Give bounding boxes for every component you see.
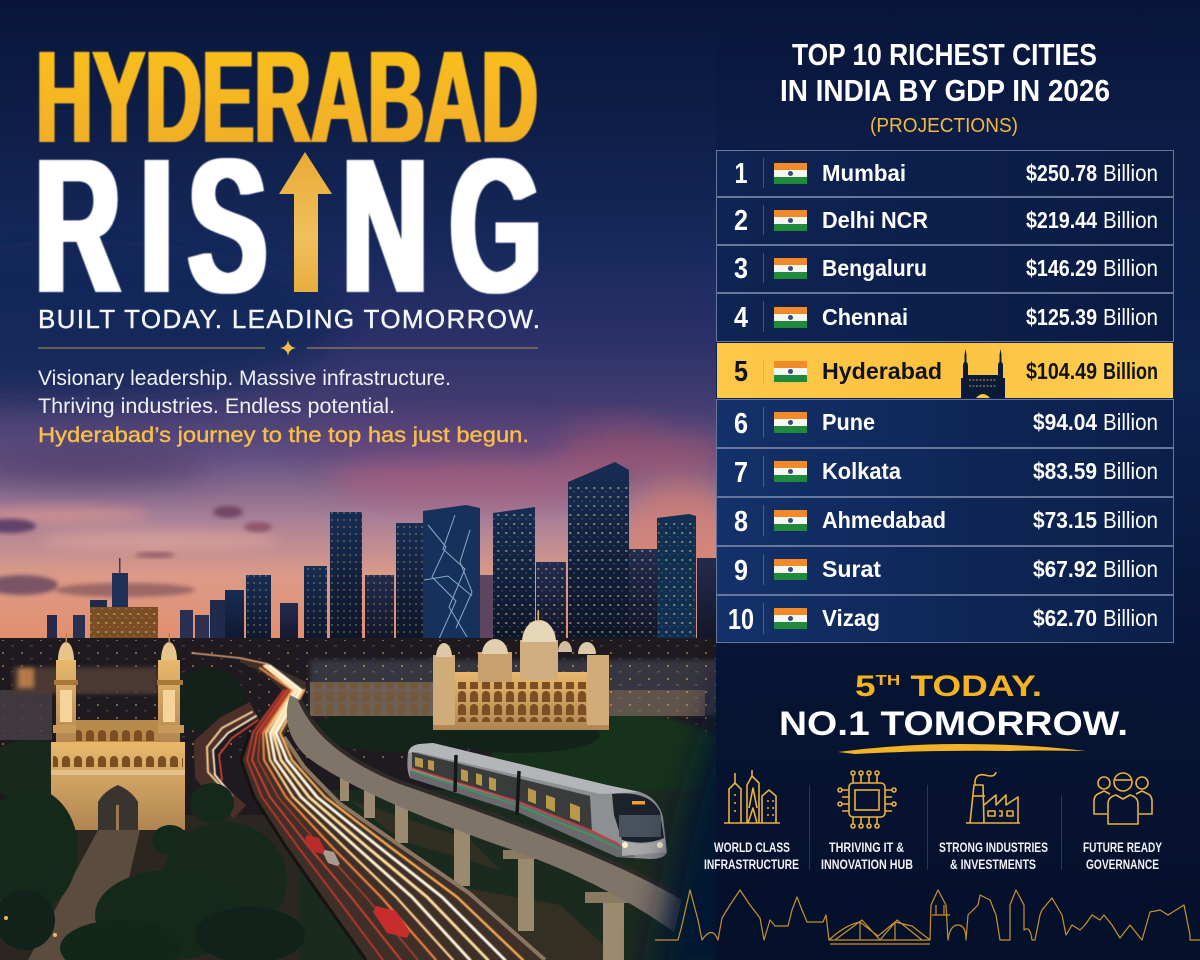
row 4 Chennai: $125.39: [1026, 304, 1097, 330]
row 6 Pune: Pune: [822, 409, 875, 435]
label: innovation: [821, 840, 913, 872]
row 9 Surat: $67.92: [1033, 556, 1097, 582]
row 6 Pune: Billion: [1103, 409, 1158, 435]
gold line-art skyline: [655, 890, 1200, 944]
ranking table: [716, 150, 1174, 642]
brush underline: [838, 744, 1086, 754]
benefit columns: [704, 770, 1162, 872]
row 5 Hyderabad highlighted: $104.49: [1026, 358, 1097, 384]
title line: RISING: RIS: [35, 118, 267, 333]
metro pillars: [340, 775, 631, 960]
row 7 Kolkata: [716, 448, 1174, 496]
metro viaduct deck: [287, 695, 682, 932]
row 7 Kolkata: 7: [734, 457, 748, 489]
charminar body: [51, 742, 185, 830]
row 1 Mumbai: Mumbai: [822, 160, 906, 186]
highway with light trails: [192, 653, 545, 960]
table heading: [780, 37, 1110, 137]
row 10 Vizag: 10: [728, 604, 754, 636]
intro text: Thriving industries. Endless potential.: [38, 395, 395, 418]
cars: [305, 835, 410, 938]
row 8 Ahmedabad: $73.15: [1033, 507, 1097, 533]
old city ground and lights: [0, 638, 730, 960]
skyline: towers: [47, 462, 716, 655]
left avenue: [28, 830, 140, 960]
label: infrastructure: INFRASTRUCTURE: [704, 857, 799, 872]
row 1 Mumbai: [716, 150, 1174, 196]
icon: people: [1094, 773, 1152, 824]
row 4 Chennai: Chennai: [822, 304, 908, 330]
row 4 Chennai: Billion: [1103, 304, 1158, 330]
label: governance: FUTURE READY: [1083, 840, 1162, 855]
label: innovation: INNOVATION HUB: [821, 857, 913, 872]
row 5 Hyderabad highlighted: [717, 343, 1173, 398]
row 6 Pune: 6: [734, 408, 748, 440]
row 9 Surat: Billion: [1103, 556, 1158, 582]
icon: infrastructure: [724, 770, 780, 823]
row 7 Kolkata: Billion: [1103, 458, 1158, 484]
label: governance: GOVERNANCE: [1086, 857, 1159, 872]
row 9 Surat: 9: [734, 555, 748, 587]
title line: HYDERABAD: HYDERABAD: [36, 23, 538, 170]
row 3 Bengaluru: $146.29: [1026, 255, 1097, 281]
far branch road: [203, 710, 254, 812]
row 8 Ahmedabad: [716, 498, 1174, 546]
slogan line: 5th today: TH: [876, 672, 900, 689]
benefit labels: [704, 840, 1162, 872]
right panel backdrop: [716, 0, 1200, 960]
slogan line: 5th today: TODAY.: [900, 670, 1042, 703]
title: HYDERABAD RISING: [35, 23, 542, 333]
metro train: [407, 743, 667, 859]
charminar minarets: [53, 633, 184, 745]
row 3 Bengaluru: Billion: [1103, 255, 1158, 281]
row 8 Ahmedabad: Ahmedabad: [822, 507, 946, 533]
main road surface: [240, 658, 545, 960]
train body: [407, 743, 667, 859]
label: industries: & INVESTMENTS: [950, 857, 1036, 872]
row 10 Vizag: Vizag: [822, 605, 880, 631]
train roof: [408, 743, 640, 794]
title line: RISING: [35, 118, 542, 333]
icon: factory: [966, 772, 1020, 823]
row 2 Delhi NCR: Delhi NCR: [822, 207, 928, 233]
row 10 Vizag: $62.70: [1033, 605, 1097, 631]
foreground trees: [0, 783, 305, 960]
row 10 Vizag: [716, 596, 1174, 642]
train window band: [412, 752, 592, 832]
train front: [612, 793, 664, 843]
divider with diamond: [38, 340, 538, 356]
row 1 Mumbai: $250.78: [1026, 160, 1097, 186]
row 3 Bengaluru: Bengaluru: [822, 255, 927, 281]
intro text: Hyderabad’s journey to the top has just begun.: [38, 424, 529, 447]
sunset clouds: [0, 240, 740, 600]
slogan: [779, 670, 1128, 754]
intro text: Visionary leadership. Massive infrastructure.: [38, 367, 451, 390]
intro text: [38, 367, 529, 447]
tagline: BUILT TODAY. LEADING TOMORROW.: [38, 304, 540, 334]
row 2 Delhi NCR: [716, 198, 1174, 244]
row 8 Ahmedabad: Billion: [1103, 507, 1158, 533]
label: infrastructure: WORLD CLASS: [714, 840, 790, 855]
icon: charminar silhouette: [961, 349, 1005, 398]
row 6 Pune: [716, 400, 1174, 448]
charminar monument: [51, 633, 185, 830]
row 5 Hyderabad highlighted: Hyderabad: [822, 358, 942, 384]
palace: [310, 610, 705, 730]
row 3 Bengaluru: 3: [734, 253, 748, 285]
row 6 Pune: $94.04: [1033, 409, 1097, 435]
train car gaps: [455, 755, 519, 815]
train stripes: [412, 768, 620, 845]
light trails: [192, 653, 523, 960]
label: industries: [939, 840, 1048, 872]
label: infrastructure: [704, 840, 799, 872]
charminar arch: [98, 785, 138, 830]
row 1 Mumbai: Billion: [1103, 160, 1158, 186]
table heading: IN INDIA BY GDP IN 2026: [780, 73, 1110, 108]
row 4 Chennai: 4: [734, 302, 748, 334]
left road edge: [241, 733, 366, 960]
row 10 Vizag: Billion: [1103, 605, 1158, 631]
row 3 Bengaluru: [716, 246, 1174, 292]
road guard wall: [284, 737, 545, 960]
row 2 Delhi NCR: Billion: [1103, 207, 1158, 233]
row 2 Delhi NCR: $219.44: [1026, 207, 1097, 233]
row 8 Ahmedabad: 8: [734, 506, 748, 538]
row 7 Kolkata: $83.59: [1033, 458, 1097, 484]
label: industries: STRONG INDUSTRIES: [939, 840, 1048, 855]
row 2 Delhi NCR: 2: [734, 205, 748, 237]
label: governance: [1083, 840, 1162, 872]
row 9 Surat: [716, 546, 1174, 594]
table heading: (PROJECTIONS): [870, 115, 1018, 137]
row 5 Hyderabad highlighted: 5: [734, 356, 748, 388]
slogan line: no.1 tomorrow: NO.1 TOMORROW.: [779, 705, 1128, 743]
row 4 Chennai: [716, 294, 1174, 342]
row 5 Hyderabad highlighted: Billion: [1103, 358, 1158, 384]
icon: rising arrow: [279, 152, 332, 292]
charminar gallery: [76, 720, 158, 744]
slogan line: 5th today: 5: [855, 670, 872, 703]
label: innovation: THRIVING IT &: [829, 840, 904, 855]
column dividers: [809, 785, 1062, 870]
row 1 Mumbai: 1: [734, 158, 748, 190]
row 9 Surat: Surat: [822, 556, 881, 582]
title line: RISING: NG: [342, 118, 542, 333]
right panel fade: [650, 630, 1200, 960]
train lower skirt: [410, 770, 636, 857]
table heading: TOP 10 RICHEST CITIES: [792, 37, 1097, 72]
row 7 Kolkata: Kolkata: [822, 458, 901, 484]
icon: chip: [838, 771, 896, 828]
